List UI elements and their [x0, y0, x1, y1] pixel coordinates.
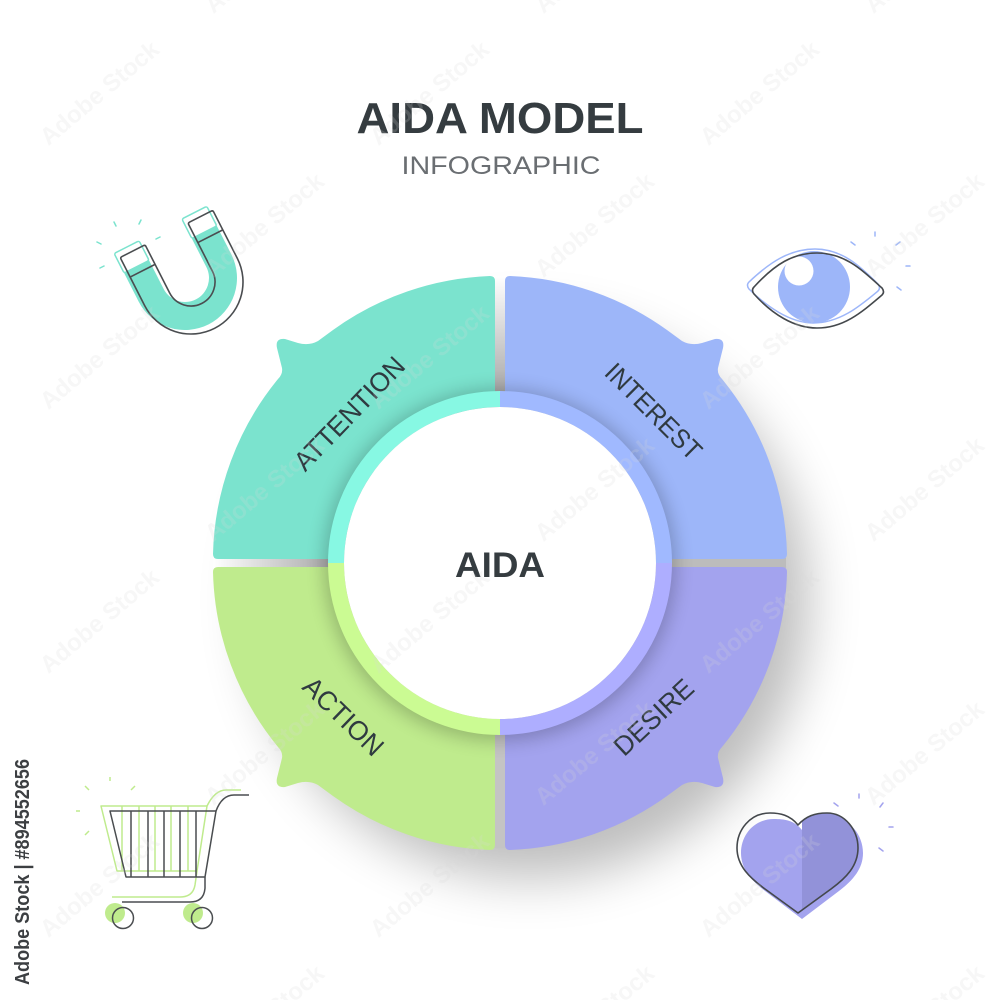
icon: eye: [748, 232, 910, 328]
stock credit: vertical text: Adobe Stock | #894552656: [12, 759, 34, 985]
icon: heart: [737, 794, 893, 919]
title: AIDA MODEL: [356, 94, 644, 143]
centre circle: [344, 407, 656, 719]
panel: interest: [505, 276, 787, 559]
ring: four coloured quadrants: [336, 399, 664, 727]
label: desire: DESIRE: [608, 673, 700, 762]
subtitle: INFOGRAPHIC: [402, 152, 600, 180]
segment gaps: [213, 276, 786, 848]
label: action: ACTION: [297, 671, 390, 762]
wheel drop shadow: [252, 322, 808, 878]
inner ring shadow: [324, 389, 676, 741]
label: attention: ATTENTION: [288, 351, 411, 477]
panel: action: [213, 567, 495, 850]
panel: desire: [505, 567, 787, 850]
centre label: AIDA: [455, 546, 545, 585]
label: interest: INTEREST: [599, 357, 708, 466]
icon: shopping cart: [76, 777, 249, 928]
icon: magnet: [97, 206, 261, 352]
panel: attention: [213, 276, 495, 559]
